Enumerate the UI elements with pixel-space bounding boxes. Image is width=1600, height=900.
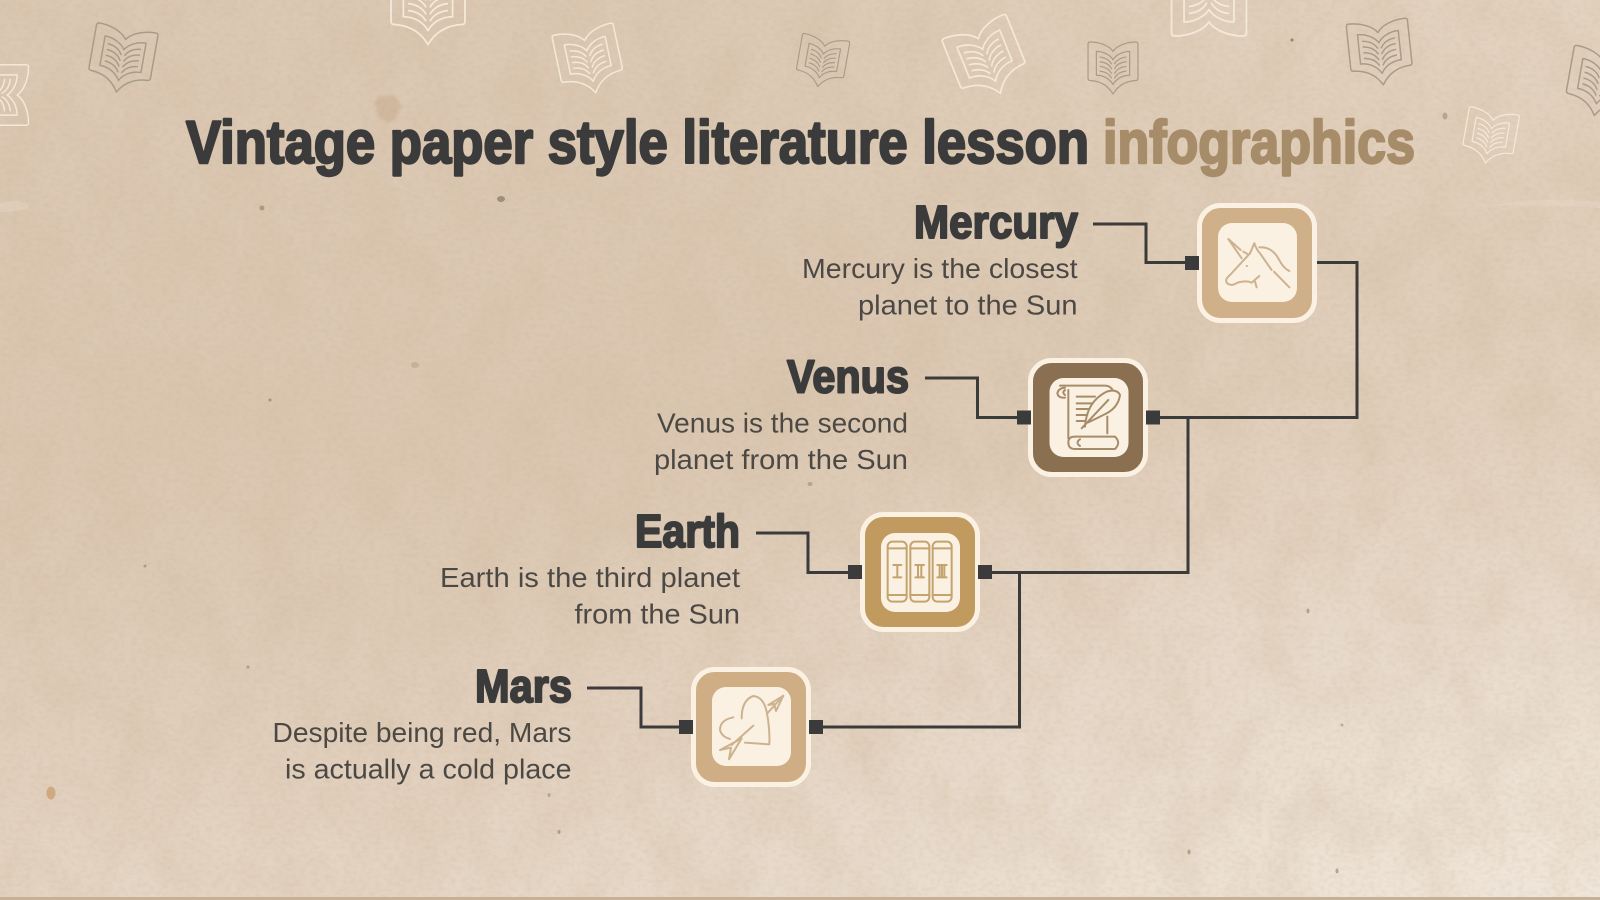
Mercury description — [802, 253, 1078, 320]
Venus heading: Venus — [787, 350, 909, 402]
title: Vintage paper style literature lesson — [186, 109, 1089, 176]
Mars heading: Mars — [475, 660, 572, 712]
Venus description: planet from the Sun — [654, 444, 908, 475]
Mercury connector square — [1185, 256, 1199, 270]
Venus description — [654, 408, 908, 475]
Earth description: Earth is the third planet — [440, 562, 740, 593]
icon: unicorn — [1200, 206, 1314, 320]
item: Mercury — [802, 196, 1314, 320]
icon: books on a shelf — [862, 514, 978, 630]
item: Earth — [440, 505, 992, 630]
Mars connector squares — [679, 720, 823, 734]
icon: heart with arrow — [694, 670, 808, 784]
Venus description: Venus is the second — [657, 408, 908, 438]
decorative open book pattern — [0, 0, 1600, 168]
Earth description — [440, 562, 740, 630]
Mercury description: planet to the Sun — [858, 290, 1078, 320]
icon: scroll and quill — [1030, 360, 1146, 474]
Earth connector squares — [848, 565, 992, 579]
Mars description: Despite being red, Mars — [272, 717, 572, 748]
Mars description: is actually a cold place — [285, 754, 572, 784]
Earth heading: Earth — [635, 505, 740, 557]
title: infographics — [1103, 109, 1415, 176]
item: Mars — [272, 660, 823, 784]
Mercury description: Mercury is the closest — [802, 253, 1078, 284]
Mars description — [272, 717, 572, 784]
Earth description: from the Sun — [574, 598, 740, 630]
Venus connector squares — [1017, 410, 1160, 424]
item: Venus — [654, 350, 1160, 475]
Mercury heading: Mercury — [914, 196, 1078, 248]
connector network — [587, 224, 1357, 727]
